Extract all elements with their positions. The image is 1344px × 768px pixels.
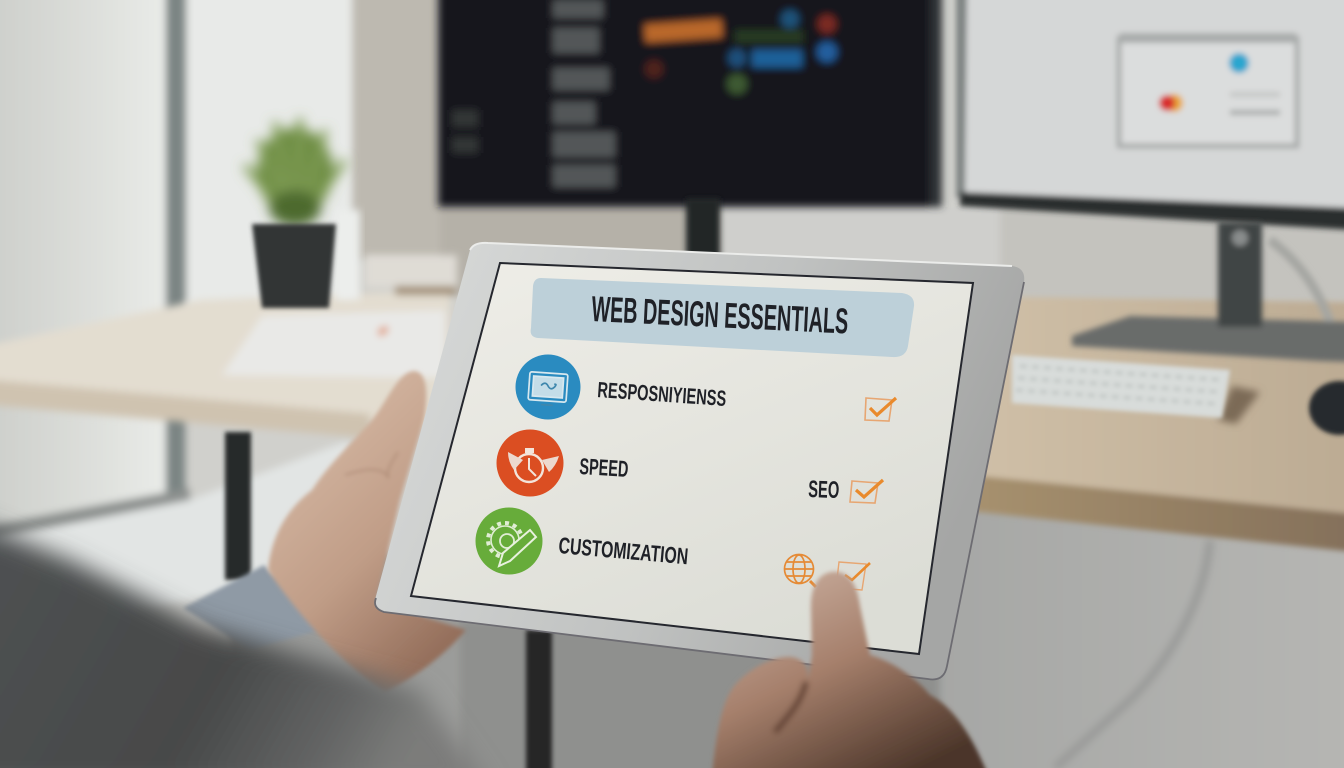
tablet [375,243,1024,679]
keyboard [1012,355,1260,424]
monitor left stand [686,198,720,258]
shoulder and sleeve in foreground [0,520,490,768]
checkbox 1 [865,398,896,421]
dashboard window on right monitor [1119,33,1297,146]
desk: left top and front beam [0,255,457,438]
desk: right top and front edge [960,296,1344,552]
monitor right stand and base [1072,222,1344,362]
shirt cuff [183,565,320,650]
plant in dark pot [245,118,360,308]
checkbox 3 [836,562,870,590]
mouse [1309,381,1344,435]
left hand holding tablet [268,371,466,692]
icon: green gear and pencil [476,508,542,574]
title banner [531,278,914,357]
pot [252,224,336,308]
icon: blue responsive screen [516,354,580,420]
row: responsiveness [516,354,896,421]
icon: orange globe with magnifier [784,554,816,587]
row: speed [496,430,883,504]
white vase behind plant [336,210,360,300]
coloured blocks on monitor [644,10,837,94]
monitor left: dark code editor [438,0,942,207]
tablet screen [411,263,973,654]
right hand with pointing finger [712,572,988,768]
label: CUSTOMIZATION: CUSTOMIZATION [558,532,689,569]
checkbox 2 [850,480,883,503]
table legs [225,432,552,768]
label: SPEED: SPEED [579,453,629,482]
papers on desk [222,310,445,378]
label: SEO: SEO [808,476,840,504]
icon: orange winged stopwatch [496,430,564,496]
monitor right: white dashboard [956,0,1344,230]
plant leaves [245,118,345,226]
label: RESPOSNIYIENSS: RESPOSNIYIENSS [597,377,727,411]
tablet body [375,243,1024,679]
title text: WEB DESIGN ESSENTIALS [591,288,849,342]
code lines on monitor [452,0,615,187]
row: customization [476,508,870,590]
